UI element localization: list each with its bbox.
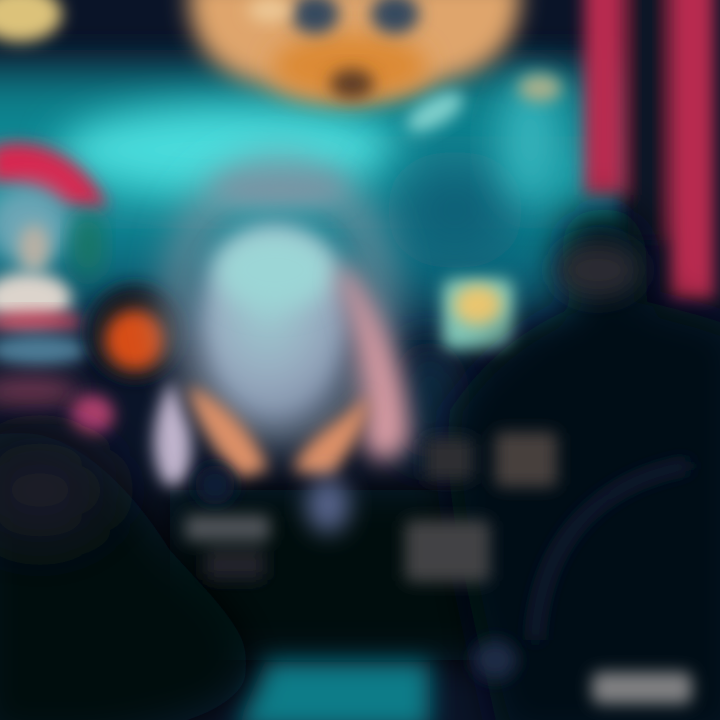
left dark silhouette [0,432,248,720]
left figure [0,185,114,435]
dog face [189,0,562,140]
yellow blob top left [0,0,62,42]
teal floor [235,662,430,720]
red curtain stripes [584,0,714,300]
red mushroom cap [0,143,108,208]
gray blurred labels [185,432,692,704]
yellow sign [442,278,514,350]
egg character [154,170,410,533]
right dark silhouette [448,208,720,720]
orange ball [87,284,183,380]
